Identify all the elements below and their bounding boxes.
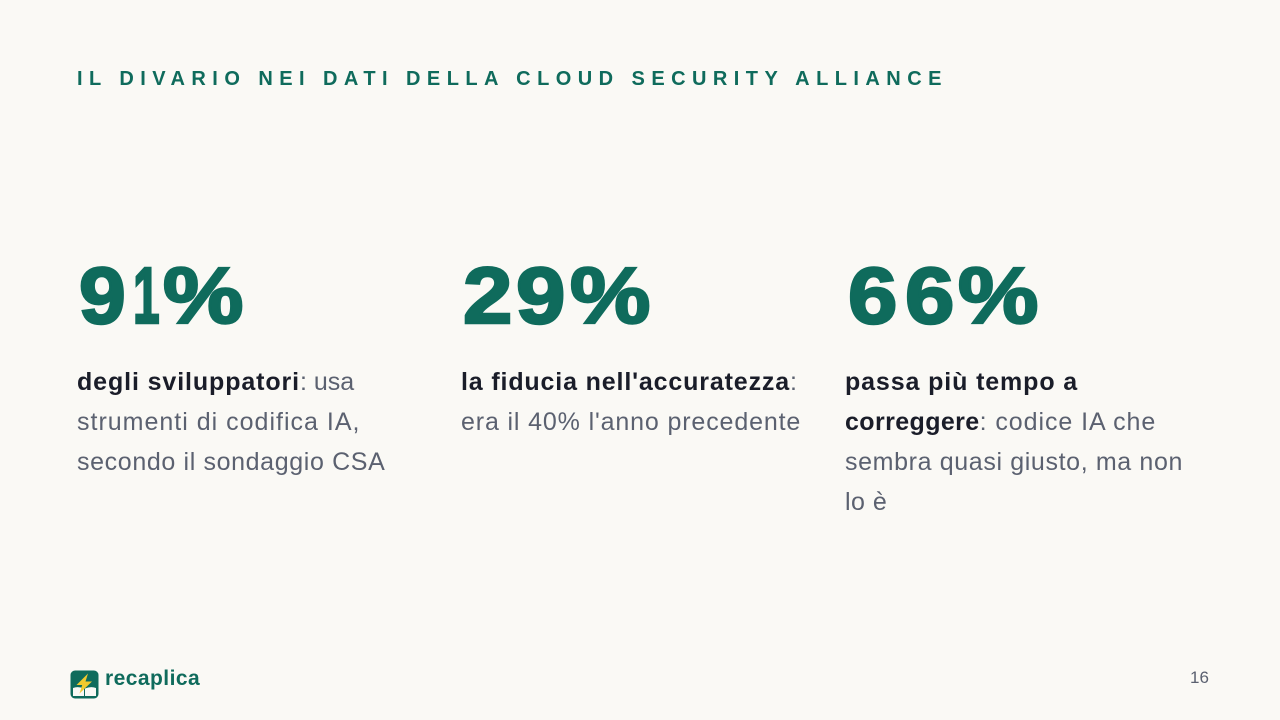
big number: 66% xyxy=(848,251,1038,340)
big number: 29%: 2 xyxy=(463,251,512,340)
big number: 91%: 9 xyxy=(79,251,126,340)
icon: lightning bolt over open book xyxy=(70,670,98,698)
big number: 91% xyxy=(79,251,243,340)
big number: 29%: % xyxy=(570,251,650,340)
big number: 91%: 1 xyxy=(133,251,160,340)
logo: recaplica xyxy=(70,667,200,698)
wordmark: recaplica xyxy=(105,667,200,690)
big number: 29% xyxy=(463,251,650,340)
description: trust: la fiducia nell'accuratezza: xyxy=(461,368,797,396)
description: developers: degli sviluppatori: usa xyxy=(77,368,354,396)
description: trust: era il 40% l'anno precedente xyxy=(461,408,801,436)
big number: 66%: 6 xyxy=(848,251,897,340)
panel: stat 91% xyxy=(77,251,385,476)
page number: 16 xyxy=(1190,668,1209,687)
panel: stat 66% xyxy=(845,251,1183,516)
big number: 29%: 9 xyxy=(516,251,565,340)
description: debugging time: correggere: codice IA che xyxy=(845,408,1156,436)
description: developers xyxy=(77,368,385,476)
description: developers: secondo il sondaggio CSA xyxy=(77,448,385,476)
description: developers: strumenti di codifica IA, xyxy=(77,408,360,436)
panel: stat 29% xyxy=(461,251,801,436)
big number: 66%: 6 xyxy=(905,251,954,340)
description: debugging time: lo è xyxy=(845,488,887,516)
big number: 91%: % xyxy=(163,251,243,340)
title: IL DIVARIO NEI DATI DELLA CLOUD SECURITY ALLIANCE xyxy=(77,68,948,90)
description: trust xyxy=(461,368,801,436)
description: debugging time: sembra quasi giusto, ma non xyxy=(845,448,1183,476)
description: debugging time xyxy=(845,368,1183,516)
big number: 66%: % xyxy=(958,251,1038,340)
description: debugging time: passa più tempo a xyxy=(845,368,1078,396)
